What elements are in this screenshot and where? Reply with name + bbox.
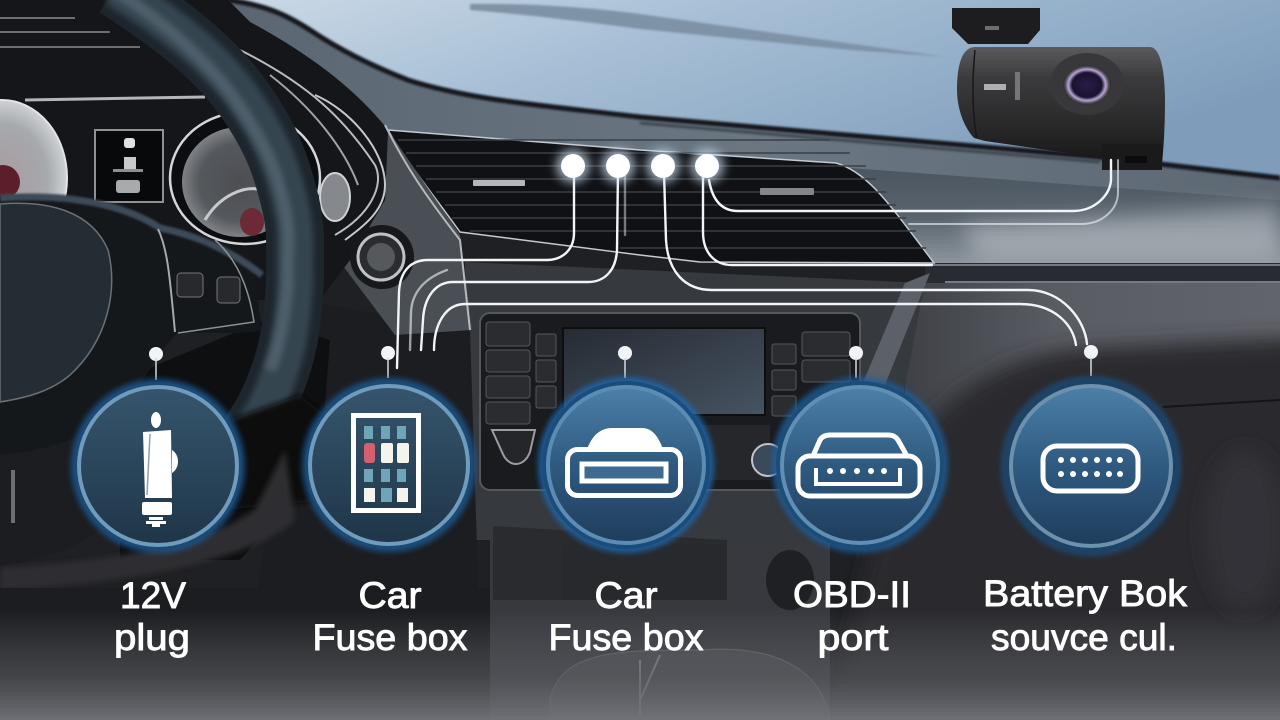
steering wheel rim (112, 0, 295, 435)
label: OBD-II port: OBD-II (793, 574, 911, 615)
option: car fuse box (302, 346, 476, 658)
label: 12V plug (114, 575, 190, 658)
option: OBD-II port (772, 346, 948, 658)
left gauge hub (0, 165, 20, 199)
icon: connector with hump (568, 428, 680, 496)
lower right soft patch (1205, 450, 1280, 610)
label: 12V plug: plug (114, 617, 190, 658)
shifter tunnel (490, 526, 830, 720)
left gauge (0, 100, 67, 256)
infotainment unit (480, 313, 860, 490)
lower dash trim (925, 263, 1280, 283)
dark area under steering spoke (120, 320, 330, 560)
upper right pillar shadow (640, 123, 1100, 162)
label: car fuse box (312, 575, 468, 658)
power cables (397, 160, 1118, 368)
glowing cable nodes (556, 149, 724, 183)
label: second car fuse box (548, 575, 704, 658)
label: car fuse box: Fuse box (312, 617, 468, 658)
lower left floor (0, 588, 490, 720)
label: battery box: Battery Bok (983, 573, 1188, 614)
windshield reflection (470, 4, 946, 57)
label: battery box: souvce cul. (991, 617, 1177, 658)
start button (350, 225, 414, 289)
right dash highlight (960, 205, 1280, 258)
icon: 12V plug (142, 412, 178, 527)
label: second car fuse box: Fuse box (548, 617, 704, 658)
center console panel (465, 262, 925, 540)
icon: OBD-II connector (798, 435, 920, 496)
dashcam (952, 8, 1165, 170)
steering wheel spoke and hub (0, 195, 262, 455)
label: OBD-II port: port (818, 617, 889, 658)
lower left soft band (0, 450, 295, 590)
lower right dash panel (905, 283, 1280, 603)
small gauge (320, 173, 350, 221)
center gauge (170, 112, 320, 244)
label: car fuse box: Car (358, 575, 422, 616)
instrument cluster (0, 0, 470, 330)
rim fade into shadow (215, 395, 345, 510)
windshield base shadow line (228, 0, 1280, 178)
center display (95, 130, 163, 202)
option: second car fuse box (538, 346, 714, 658)
option: 12V plug (71, 347, 245, 658)
windshield (200, 0, 1280, 178)
icon: fuse box (354, 416, 418, 510)
label: battery box (983, 573, 1188, 658)
column beside start button (340, 130, 472, 335)
label: OBD-II port (793, 574, 911, 658)
option: battery box (983, 345, 1188, 658)
air vent (388, 130, 934, 263)
icon: battery connector (1043, 446, 1138, 491)
console side strut (862, 273, 930, 385)
lower right seam (1163, 400, 1280, 407)
left lower panel (0, 430, 110, 566)
left dark footwell (250, 300, 480, 640)
dashboard top band (228, 0, 1280, 265)
label: 12V plug: 12V (120, 575, 186, 616)
label: second car fuse box: Car (594, 575, 658, 616)
bottom fade (0, 610, 1280, 720)
lower right dark hump (840, 337, 1280, 680)
right dash surface (850, 168, 1280, 265)
